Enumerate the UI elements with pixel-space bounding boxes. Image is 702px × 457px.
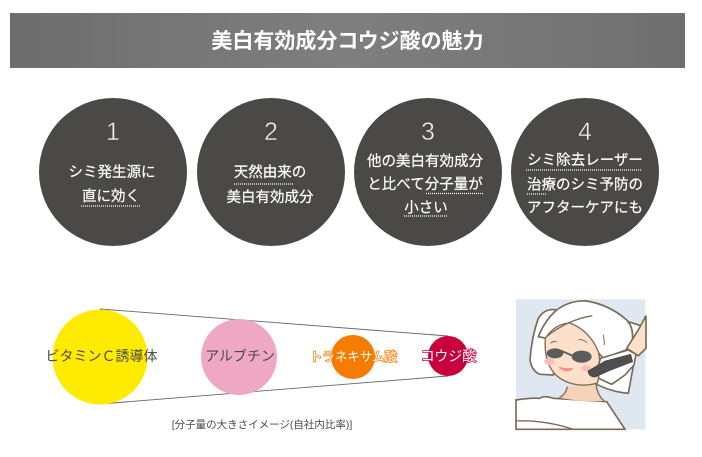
panel: benefit 1 (39, 98, 187, 246)
panel: benefit 2: 2 (264, 118, 278, 146)
goggles (547, 348, 592, 363)
panel: benefit 2: 美白有効成分 (226, 189, 314, 206)
panel: benefit 2 (197, 98, 345, 246)
pillow (593, 320, 641, 393)
panel: benefit 1: 1 (106, 118, 120, 146)
panel: benefit 4: シミ除去レーザー (527, 152, 643, 169)
panel: benefit 4: 治療のシミ予防の (527, 176, 643, 194)
towel (538, 301, 633, 358)
blush and mouth (544, 358, 554, 365)
chart caption: [分子量の大きさイメージ(自社内比率)] (172, 418, 352, 431)
face (545, 323, 600, 385)
laser device (588, 354, 633, 377)
title banner (10, 13, 685, 68)
panel: benefit 4 (511, 98, 659, 246)
blanket (516, 397, 625, 429)
eyebrows (551, 340, 587, 343)
panel: benefit 4: アフターケアにも (527, 200, 643, 216)
arm (627, 316, 646, 356)
circle: vitamin C derivative: ビタミンＣ誘導体 (46, 348, 158, 364)
panel: benefit 1: 直に効く (82, 188, 140, 205)
neck (559, 384, 604, 401)
illustration: woman receiving laser treatment (516, 299, 646, 429)
title banner: 美白有効成分コウジ酸の魅力 (211, 29, 484, 53)
towel fold (546, 316, 592, 337)
panel: benefit 4: 4 (578, 118, 592, 146)
circle: vitamin C derivative (46, 310, 158, 404)
circle: kojic acid (421, 336, 476, 376)
panel: benefit 1: シミ発生源に (68, 164, 156, 181)
circle: tranexamic acid (310, 335, 398, 379)
panel: benefit 3: 3 (421, 118, 435, 146)
chart: molecular size comparison (46, 309, 476, 404)
circle: kojic acid: コウジ酸 (421, 348, 476, 364)
panel: benefit 3 (354, 98, 502, 246)
circle: arbutin (201, 319, 277, 395)
circle: tranexamic acid: トラネキサム酸 (310, 349, 398, 364)
gloved hand (598, 350, 636, 384)
panel: benefit 3: 他の美白有効成分 (367, 153, 483, 170)
panel: benefit 3: 小さい (404, 200, 448, 216)
circle: arbutin: アルブチン (205, 348, 275, 364)
panel: benefit 3: と比べて分子量が (367, 176, 483, 193)
panel: benefit 2: 天然由来の (234, 164, 306, 181)
